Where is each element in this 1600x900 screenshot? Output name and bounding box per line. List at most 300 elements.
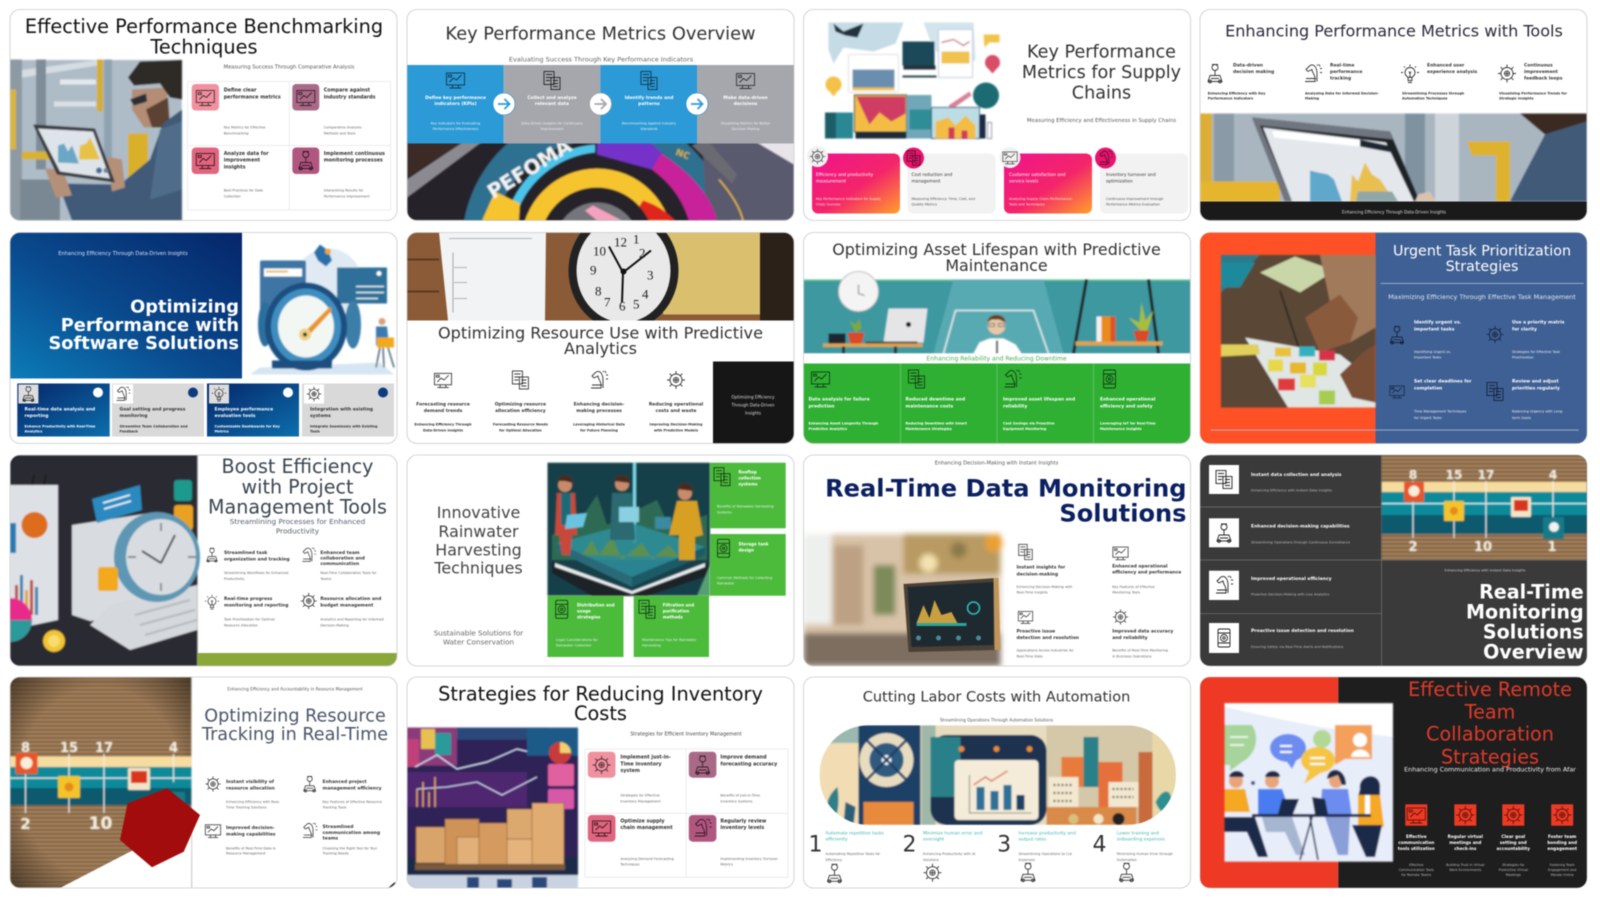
item 2: Enhanced team	[320, 551, 360, 556]
card: rooftop: collection	[738, 475, 761, 480]
item: analyze data: Best Practices for Data	[224, 188, 263, 192]
title: Optimizing Asset Lifespan with Predictive	[832, 240, 1161, 259]
card: distribution: Distribution and	[577, 603, 615, 608]
row 3: Proactive Decision-Making with Live Analytics	[1251, 592, 1330, 596]
subtitle: Streamlining Operations Through Automation Solutions	[940, 717, 1053, 722]
item 3: experience analysis	[1427, 69, 1478, 75]
item: define metrics: Benchmarking	[224, 132, 249, 136]
item 1: Performance Indicators	[1208, 96, 1253, 100]
item 1: Enhancing Efficiency with Real-	[226, 800, 280, 804]
item 3: Time Management Techniques	[1414, 410, 1466, 414]
item: compare standards	[292, 84, 376, 136]
item: monitoring: Implement continuous	[324, 151, 385, 157]
illustration: supply chain dashboards	[825, 22, 1000, 138]
title: Techniques	[433, 559, 523, 578]
grid	[585, 749, 788, 877]
item 2: Building Trust in Virtual	[1446, 863, 1484, 867]
item 2: for Optimal Allocation	[499, 428, 542, 432]
item 3: Task Prioritization for Optimal	[224, 618, 275, 622]
title: Techniques	[149, 35, 258, 58]
green benefits panel: prediction	[808, 403, 834, 409]
item: monitoring: Performance Improvement	[324, 194, 370, 198]
card: real-time data: Enhance Productivity with Real-Time	[24, 424, 95, 428]
title: Collaboration	[1426, 723, 1554, 746]
item: inventory turnover: Inventory turnover and	[1106, 173, 1156, 178]
item 2: Work Environments	[1449, 868, 1482, 872]
title: Urgent Task Prioritization	[1393, 244, 1571, 260]
subtitle: Water Conservation	[443, 637, 514, 646]
green benefits panel: Leveraging IoT for Real-Time	[1100, 422, 1156, 426]
card: filtration: Maintenance Tips for Rainwater	[642, 638, 696, 642]
step band: indicators (KPIs)	[434, 101, 477, 107]
timeline image: 8	[1409, 468, 1417, 482]
item: efficiency: Chain Success	[816, 203, 841, 207]
photo: clock on wooden wall: 8	[595, 284, 602, 298]
card: filtration: purification	[663, 609, 689, 614]
item 4: Balancing Urgency with Long-	[1512, 410, 1563, 414]
item 3	[588, 815, 674, 867]
timeline image: 4	[1549, 468, 1557, 482]
item 2: Forecasting Resource Needs	[493, 422, 548, 426]
card: distribution: usage	[577, 609, 591, 614]
item 4: Morale Online	[1551, 873, 1574, 877]
photo: tablet dashboard	[804, 534, 1002, 666]
item 2: efficiency and performance	[1112, 569, 1181, 575]
item 3: Analyzing Demand Forecasting	[620, 857, 674, 861]
title: Team	[1464, 701, 1515, 724]
item 3: Set clear deadlines for	[1414, 380, 1471, 384]
item: inventory turnover	[1095, 148, 1188, 214]
item 4: budget management	[320, 602, 374, 608]
item 3: Automation Techniques	[1402, 96, 1447, 100]
item 1: Forecasting resource	[416, 402, 470, 408]
item 2: Prioritization	[1512, 356, 1534, 360]
step band: Performance Effectiveness	[433, 127, 479, 131]
card: rooftop: Benefits of Rainwater Harvesting	[717, 505, 774, 509]
item 1: tools utilization	[1398, 846, 1435, 851]
step 3: Expenses	[1018, 858, 1035, 862]
item 2: Key Features of Effective Resource	[322, 800, 382, 804]
item 2: Teams	[319, 577, 331, 581]
step 4: Minimizing Human Error through	[1117, 852, 1173, 856]
blue heading block: Optimizing	[130, 296, 239, 318]
subtitle: Maximizing Efficiency Through Effective Task Management	[1388, 293, 1576, 301]
green benefits panel: efficiency and safety	[1100, 403, 1153, 409]
item 4: Streamlined	[322, 825, 353, 830]
title: Chains	[1072, 84, 1131, 104]
step band: Key Indicators for Evaluating	[431, 122, 480, 126]
black callout: Through Data-Driven	[730, 402, 775, 408]
item: define metrics: Define clear	[224, 88, 256, 94]
timeline image: 15	[60, 741, 78, 756]
photo: clock on wooden wall: 9	[590, 262, 596, 278]
item 1	[1016, 544, 1072, 595]
timeline image: 1	[1547, 540, 1557, 555]
title: Boost Efficiency	[222, 455, 373, 478]
step band: Identify trends and	[625, 96, 673, 101]
card: storage	[710, 534, 786, 596]
item 4: Reducing operational	[649, 402, 703, 408]
card: filtration	[634, 596, 709, 657]
card: storage: Storage tank	[738, 541, 768, 546]
item 1: Instant visibility of	[226, 780, 274, 785]
step 4: 4	[1092, 833, 1106, 858]
image: performance gauge: PEFOMA	[483, 133, 576, 204]
item 3: monitoring and reporting	[224, 602, 288, 608]
subtitle strip	[804, 354, 1190, 364]
card: real-time data	[17, 384, 110, 436]
card: real-time data: Analytics	[24, 430, 42, 434]
row 4: Proactive issue detection and resolution	[1251, 628, 1354, 634]
item 4	[301, 593, 384, 628]
panel: Key Performance Metrics Overview	[406, 8, 795, 222]
black callout: Optimizing Efficiency	[731, 394, 775, 400]
item 1	[414, 373, 472, 432]
item 4	[1547, 804, 1577, 877]
item 4: Decision-Making	[320, 624, 349, 628]
card: filtration: methods	[663, 615, 683, 620]
illustration: automation pill	[820, 725, 1176, 825]
item 3: setting and	[1500, 840, 1527, 845]
card: distribution: strategies	[577, 615, 601, 620]
item 1: Productivity	[224, 577, 244, 581]
item 4: term Goals	[1512, 416, 1531, 420]
item: monitoring	[292, 148, 385, 198]
item 3: Enhanced user	[1427, 64, 1464, 68]
image: data screens and boxes	[407, 728, 578, 888]
item: define metrics: Key Metrics for Effective	[224, 126, 265, 130]
item 4: Review and adjust	[1512, 380, 1559, 384]
item 4: teams	[322, 835, 338, 841]
item 2: Optimizing resource	[495, 402, 546, 408]
card: goal setting	[112, 384, 204, 436]
item 1: resource allocation	[226, 786, 275, 792]
photo: clock on wooden wall: 12	[614, 234, 627, 250]
item 3: completion	[1414, 385, 1442, 391]
step band: Data-Driven Insights for Continuous	[521, 122, 583, 126]
item: monitoring: Interpreting Results for	[324, 188, 363, 192]
title: with Project	[242, 475, 354, 498]
item 4	[649, 371, 704, 432]
illustration: clock and charts on dark	[0, 455, 200, 666]
card: goal setting: Streamline Team Collaboration and	[120, 424, 188, 428]
item: cost reduction: Quality Metrics	[912, 203, 937, 207]
step 4: Automation	[1117, 858, 1137, 862]
item 3: Techniques	[619, 863, 640, 867]
timeline image	[10, 677, 191, 888]
card: storage: design	[738, 547, 754, 552]
item 2: allocation efficiency	[495, 408, 546, 414]
title: Key Performance Metrics Overview	[445, 24, 756, 44]
card: real-time data: reporting	[24, 413, 48, 419]
step band: Improvement	[540, 127, 564, 131]
item: define metrics: performance metrics	[224, 94, 281, 100]
item 1: Inventory Management	[620, 799, 661, 803]
item: inventory turnover: optimization	[1106, 179, 1133, 185]
card: distribution: Rainwater Collection	[556, 644, 591, 648]
timeline image: 15	[1446, 468, 1462, 482]
item: monitoring: monitoring processes	[324, 158, 383, 164]
item 3	[205, 825, 276, 856]
item 1: Streamlining Workflows for Enhanced	[224, 571, 288, 575]
green benefits panel: Maintenance Insights	[1100, 427, 1142, 431]
photo: clock on wooden wall: 3	[647, 268, 654, 282]
item 2: collaboration and	[320, 556, 365, 562]
photo: man with tablet in factory	[10, 60, 182, 220]
item 3: Streamlining Processes through	[1402, 92, 1464, 96]
title: Analytics	[564, 339, 637, 358]
blue heading block	[10, 232, 242, 378]
item 3: Proactive issue	[1016, 629, 1055, 634]
title: Strategies for Reducing Inventory	[438, 683, 763, 706]
subtitle: Sustainable Solutions for	[434, 628, 523, 637]
row 4: Ensuring Safety via Real-Time Alerts and Notifications	[1251, 645, 1344, 649]
item 4: Strategic Insights	[1499, 96, 1534, 100]
item 4: Tracking Needs	[322, 852, 349, 856]
item 2	[1446, 804, 1485, 872]
subtitle: Enhancing Efficiency and Accountability in Resource Management	[227, 687, 363, 692]
step 3: Streamlining Operations to Cut	[1018, 852, 1072, 856]
panel: Urgent Task Prioritization Strategies	[1200, 232, 1588, 444]
illustration: rainwater model	[548, 463, 710, 596]
title: Solutions	[1059, 500, 1186, 528]
blue heading block: Software Solutions	[48, 333, 239, 354]
title: Cutting Labor Costs with Automation	[863, 690, 1130, 706]
item 1	[1398, 804, 1435, 877]
item 3	[1401, 62, 1478, 100]
timeline image: 17	[95, 741, 113, 756]
step 1: Efficiency	[826, 858, 842, 862]
blue heading block: Performance with	[61, 315, 239, 336]
item 4	[1498, 62, 1567, 100]
timeline image	[1382, 455, 1587, 560]
item 1: Effective	[1409, 863, 1423, 867]
step 1: Automate repetitive tasks	[826, 832, 884, 837]
card: distribution: Legal Considerations for	[556, 638, 598, 642]
item 3: Resource Management	[226, 852, 266, 856]
row 2	[1209, 518, 1350, 547]
card: goal setting: Feedback	[120, 430, 139, 434]
panel: Enhancing Performance Metrics with Tools	[1200, 10, 1587, 220]
green benefits panel: maintenance costs	[906, 403, 953, 409]
item: analyze data: improvement	[224, 158, 261, 164]
item 4: improvement	[1524, 69, 1559, 75]
item 1	[205, 776, 281, 809]
black callout	[713, 362, 794, 444]
item 3: Strategies for	[1502, 863, 1525, 867]
timeline image: 10	[89, 814, 112, 834]
title: Real-Time Data Monitoring	[825, 475, 1186, 503]
item 1: Communication Tools	[1399, 868, 1434, 872]
item 2: performance	[1330, 69, 1362, 75]
item 2: Enhanced project	[322, 780, 367, 785]
step 2: 2	[902, 833, 916, 858]
step band	[407, 65, 794, 144]
item 4: feedback loops	[1524, 76, 1563, 82]
step 2: oversight	[923, 836, 944, 842]
card: integration: Integration with existing	[310, 408, 373, 412]
title: Optimizing Resource	[204, 707, 386, 727]
item 3: detection and resolution	[1016, 635, 1079, 641]
item 2	[493, 371, 548, 432]
item 2: Real-time	[1330, 64, 1354, 68]
panel: Real-Time Monitoring Solutions Overview	[1200, 455, 1587, 666]
step 2: Enhancing Productivity with AI	[923, 852, 975, 856]
row 1: Enhancing Efficiency with Instant Data Insights	[1251, 488, 1332, 492]
item 1: Identifying Urgent vs.	[1414, 350, 1451, 354]
item 4: inventory levels	[720, 825, 764, 831]
item 4: Visualizing Performance Trends for	[1499, 92, 1567, 96]
card: goal setting: monitoring	[120, 413, 147, 419]
photo: clock on wooden wall: 10	[593, 244, 606, 258]
title: Strategies	[1441, 745, 1539, 768]
green benefits panel: Predictive Analytics	[808, 427, 847, 431]
item 2: Benefits of Just-in-Time	[720, 794, 760, 798]
green benefits panel: Cost Savings via Proactive	[1003, 422, 1054, 426]
subtitle: Evaluating Success Through Key Performance Indicators	[509, 56, 694, 64]
arrow 1	[493, 93, 515, 115]
item 1: Streamlined task	[224, 551, 267, 556]
photo: clock on wooden wall: 7	[604, 294, 611, 310]
item: customer satisfaction	[1000, 147, 1092, 214]
item 4: priorities regularly	[1512, 385, 1560, 391]
item 4: Fostering Team	[1550, 863, 1575, 867]
photo: clock on wooden wall: 2	[639, 246, 646, 260]
step band: Visualizing Metrics for Better	[721, 122, 770, 126]
title: Management Tools	[208, 495, 387, 518]
item 1	[588, 752, 671, 803]
item 1: decision-making	[1016, 571, 1058, 577]
item 3	[205, 595, 288, 628]
title: Monitoring	[1466, 600, 1584, 623]
item 1: Strategies for Effective	[620, 794, 660, 798]
item: compare standards: industry standards	[324, 94, 376, 100]
item 1: Identify urgent vs.	[1414, 320, 1461, 326]
timeline image: 2	[20, 815, 31, 833]
item 2: forecasting accuracy	[720, 761, 778, 767]
item 2: Strategies for Effective Task	[1512, 350, 1560, 354]
item 2: Tracking Tools	[322, 805, 347, 809]
step band: Collect and analyze	[527, 96, 577, 101]
green benefits panel: Enhancing Asset Longevity Through	[808, 422, 878, 426]
arrow 2	[590, 93, 612, 115]
item: analyze data	[192, 148, 269, 198]
title: Rainwater	[438, 522, 519, 541]
item: customer satisfaction: Customer satisfaction and	[1009, 173, 1065, 178]
item 2: communication	[320, 561, 359, 567]
card: evaluation tools: Customizable Dashboards for Key	[214, 424, 280, 428]
item 1: Effective	[1406, 834, 1427, 839]
timeline image: 8	[21, 741, 30, 756]
card: evaluation tools: Metrics	[214, 430, 229, 434]
step 1: Automating Repetitive Tasks for	[826, 852, 880, 856]
image: tablet with charts	[1200, 114, 1587, 202]
item 1: system	[620, 768, 640, 774]
step band: decisions	[734, 101, 758, 107]
step 2: Solutions	[923, 858, 939, 862]
item 1: Implement just-in-	[620, 755, 671, 761]
item: compare standards: Compare against	[324, 88, 370, 94]
card: integration: systems	[310, 413, 331, 419]
item 1: demand trends	[424, 408, 463, 414]
item: inventory turnover: Performance Metrics Evaluation	[1106, 203, 1160, 207]
item 1: for Remote Teams	[1401, 873, 1431, 877]
subtitle: Enhancing Efficiency with Instant Data Insights	[1445, 569, 1526, 573]
item 2: meetings and	[1449, 840, 1481, 845]
item 3: Enhancing decision-	[574, 402, 624, 408]
item: efficiency: Key Performance Indicators for Supply	[816, 197, 881, 201]
item 2: management efficiency	[322, 786, 382, 792]
item 1: organization and tracking	[224, 556, 290, 562]
item 2: Making	[1305, 96, 1320, 100]
step band: Decision Making	[731, 127, 760, 131]
item 1: Time inventory	[620, 761, 662, 767]
item 1: Time Tracking Solutions	[225, 805, 267, 809]
subtitle: Productivity	[276, 527, 320, 536]
card: distribution	[548, 596, 624, 657]
item: define metrics	[192, 84, 281, 136]
item: analyze data: Analyze data for	[224, 151, 269, 157]
item 1: important tasks	[1414, 326, 1455, 332]
panel: Boost Efficiency with Project Management Tools	[0, 455, 397, 666]
item 4: Foster team	[1548, 834, 1576, 839]
item 4: Metrics	[720, 863, 733, 867]
green benefits panel: reliability	[1003, 403, 1027, 409]
card: integration: Integrate Seamlessly with Existing	[310, 424, 377, 428]
panel: Real-Time Data Monitoring Solutions	[804, 455, 1190, 666]
card: goal setting: Goal setting and progress	[120, 408, 185, 412]
illustration: remote team meeting	[1224, 703, 1393, 862]
item 1: Data-Driven Insights	[423, 428, 463, 432]
step band: Define key performance	[425, 96, 486, 101]
row 1: Instant data collection and analysis	[1251, 472, 1342, 478]
image: performance gauge	[406, 142, 794, 221]
photo: clock on wooden wall: 1	[633, 232, 640, 246]
photo: clock on wooden wall	[407, 210, 794, 330]
item 2: Real-Time Collaboration Tools for	[320, 571, 377, 575]
panel: Effective Remote Team Collaboration Strategies	[1200, 677, 1587, 888]
subtitle: Strategies for Efficient Inventory Management	[630, 732, 742, 738]
item: inventory turnover: Continuous Improvement through	[1106, 197, 1163, 201]
item 3: Improved decision-	[226, 826, 275, 831]
item: customer satisfaction: Analyzing Supply Chain Performance:	[1009, 197, 1073, 201]
timeline image: 17	[1478, 468, 1494, 482]
item 1	[1208, 62, 1274, 100]
item: cost reduction: Cost reduction and	[912, 173, 952, 178]
item 1: Data-driven	[1233, 64, 1263, 68]
item 3: accountability	[1497, 846, 1530, 851]
row 3: Improved operational efficiency	[1251, 576, 1332, 582]
item 1: Enhancing Efficiency with Key	[1208, 92, 1266, 96]
black callout: Insights	[745, 410, 761, 416]
item 1	[207, 548, 290, 581]
title: Innovative	[437, 503, 520, 522]
panel: Optimizing Asset Lifespan with Predictive Maintenance	[804, 232, 1190, 444]
item 4	[1487, 378, 1564, 420]
item 2: for clarity	[1512, 326, 1537, 332]
item 2: Analyzing Data for Informed Decision-	[1305, 92, 1379, 96]
subtitle: Measuring Efficiency and Effectiveness in Supply Chains	[1027, 118, 1176, 124]
illustration: performance clock	[250, 244, 394, 374]
item: efficiency: measurement	[816, 179, 846, 185]
green benefits panel: Enhanced operational	[1100, 398, 1155, 402]
item 4: costs and waste	[656, 408, 696, 414]
title: Effective Remote	[1408, 678, 1572, 701]
item: analyze data: insights	[224, 164, 246, 170]
item 4: and reliability	[1112, 635, 1148, 641]
item 4: Resource allocation and	[320, 597, 381, 602]
item: analyze data: Collection	[224, 194, 241, 198]
